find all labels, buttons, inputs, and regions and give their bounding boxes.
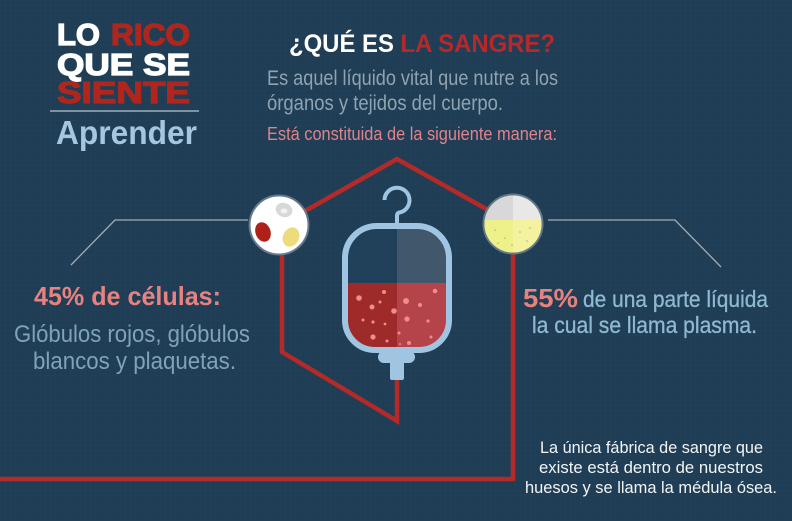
icon: blood bag <box>345 188 449 380</box>
footer note <box>525 438 777 497</box>
icon: plasma circle <box>484 194 542 254</box>
brand word: Aprender: Aprender <box>56 114 197 151</box>
title: ¿QUÉ ES LA SANGRE? <box>289 29 555 58</box>
left description <box>14 321 250 375</box>
logo: Lo rico que se siente: SIENTE <box>57 75 190 110</box>
footer note: La única fábrica de sangre que <box>540 438 763 457</box>
right description: 55% plasma: la cual se llama plasma. <box>532 312 757 338</box>
logo: Lo rico que se siente: RICO <box>111 17 190 52</box>
left description: Glóbulos rojos, glóbulos <box>14 321 250 348</box>
intro text <box>267 67 558 115</box>
footer note: existe está dentro de nuestros <box>539 458 763 477</box>
right pointer line <box>548 220 721 267</box>
logo: Lo rico que se siente <box>50 17 199 112</box>
red connector line <box>0 159 513 479</box>
footer note: huesos y se llama la médula ósea. <box>525 478 777 497</box>
left heading: 45% de células: 45% de células: <box>34 281 221 311</box>
logo: Lo rico que se siente: LO <box>57 17 100 52</box>
icon: blood cells circle <box>250 196 308 254</box>
intro text: Es aquel líquido vital que nutre a los <box>267 67 558 90</box>
intro text: órganos y tejidos del cuerpo. <box>267 92 503 115</box>
right description: 55% plasma: 55% <box>523 283 578 313</box>
logo: Lo rico que se siente: QUE SE <box>57 47 190 82</box>
left description: blancos y plaquetas. <box>33 348 236 375</box>
left pointer line <box>71 220 248 265</box>
right description: 55% plasma: de una parte líquida <box>583 286 768 312</box>
subheading: Está constituida de la siguiente manera: <box>267 124 557 144</box>
right description: 55% plasma <box>523 283 768 338</box>
